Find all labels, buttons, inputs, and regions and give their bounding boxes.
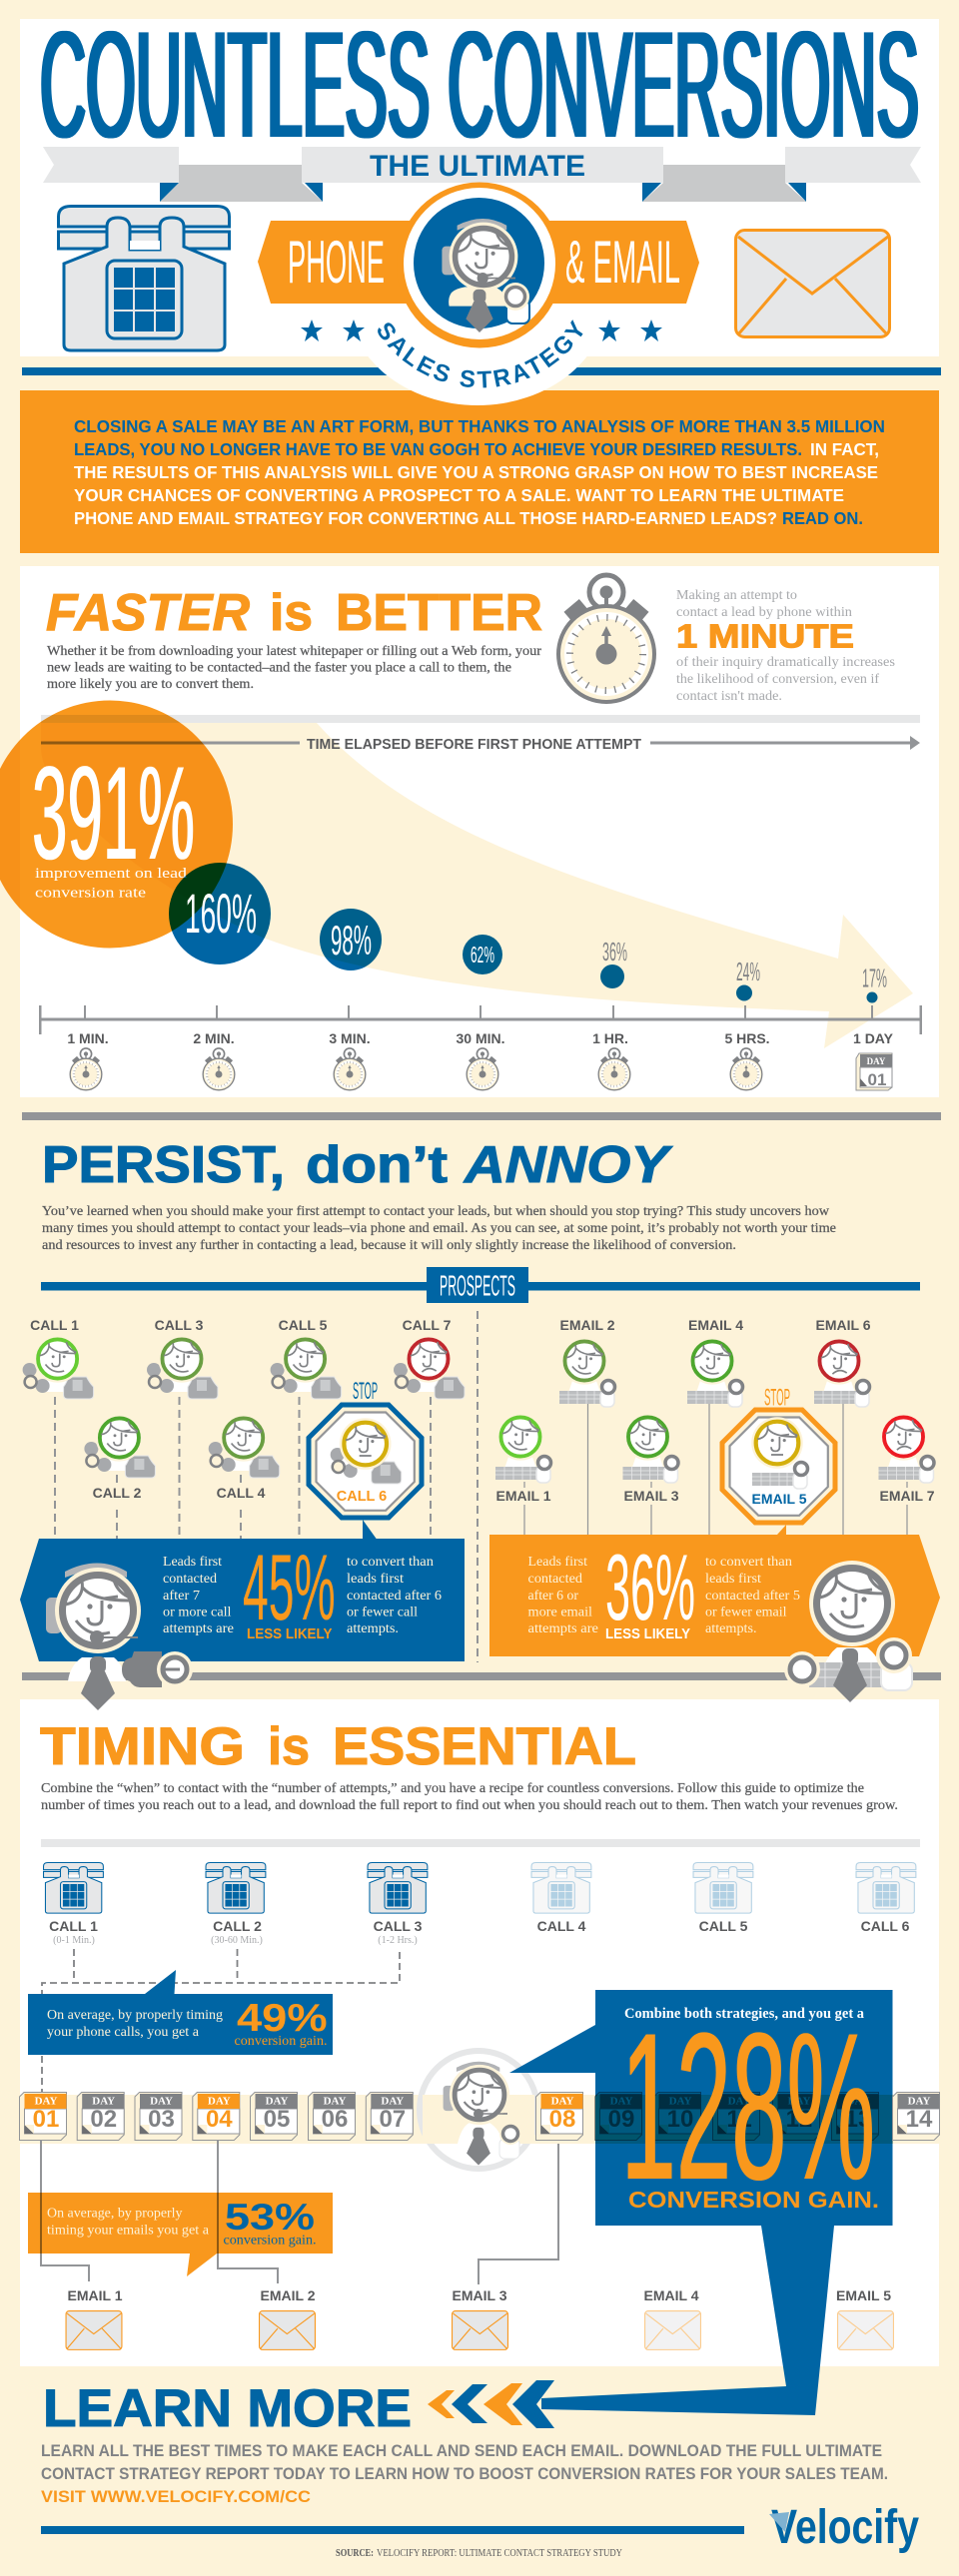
day 10: DAY	[669, 2096, 691, 2108]
learn more text: CONTACT STRATEGY REPORT TODAY TO LEARN HOW TO BOOST CONVERSION RATES FOR YOUR SALES TEAM.	[41, 2464, 888, 2483]
connector lines: emails	[524, 1404, 907, 1535]
callout: 36% less likely: or fewer email	[705, 1606, 787, 1619]
learn more text: VISIT WWW.VELOCIFY.COM/CC	[41, 2487, 311, 2506]
email labels: EMAIL 4	[644, 2287, 699, 2303]
day 13: 13	[845, 2106, 871, 2133]
ribbon text: THE ULTIMATE	[370, 150, 585, 183]
body text: number of times you reach out to a lead, and download the full report to find out when you should reach out to them. Then watch your revenues grow.	[41, 1798, 898, 1813]
decaying arrow	[41, 723, 913, 1048]
intro text	[74, 416, 885, 528]
bubble: 98%: 98%	[331, 917, 372, 964]
email 7: EMAIL 7	[880, 1488, 935, 1504]
call 3	[147, 1317, 218, 1399]
day 12	[773, 2093, 819, 2141]
callout: 45% less likely: attempts are	[163, 1621, 234, 1636]
body text	[42, 1204, 836, 1253]
email 7	[879, 1413, 935, 1504]
email labels	[68, 2287, 891, 2303]
email labels: EMAIL 3	[453, 2287, 507, 2303]
callout: 1 minute: of their inquiry dramatically increases	[676, 655, 895, 670]
stop sign: email 5: EMAIL 5	[752, 1491, 807, 1507]
email 1	[495, 1413, 551, 1504]
email 1: EMAIL 1	[496, 1488, 551, 1504]
call time ranges	[53, 1935, 418, 1946]
timeline labels: 30 MIN.	[456, 1030, 505, 1046]
chevrons	[428, 2380, 554, 2428]
day 01: DAY	[35, 2096, 57, 2108]
day 07: DAY	[381, 2096, 404, 2108]
agent left	[46, 1564, 193, 1710]
call time ranges: (1-2 Hrs.)	[378, 1935, 418, 1946]
callout: 45% less likely: leads first	[347, 1572, 404, 1587]
callout: 45% less likely: after 7	[163, 1589, 200, 1604]
email 2	[559, 1317, 615, 1407]
day 06	[308, 2093, 356, 2141]
divider bar	[41, 1839, 920, 1847]
icon: calendar day 01: 01	[868, 1070, 886, 1089]
callout: 36% less likely: contacted after 5	[705, 1589, 800, 1604]
badge: phone and email	[258, 182, 699, 347]
callout: 53%: On average, by properly	[47, 2207, 182, 2222]
text: 36%	[602, 937, 627, 966]
bubble: 391%: conversion rate	[35, 885, 146, 901]
call labels: CALL 4	[537, 1918, 586, 1934]
day 10: 10	[667, 2106, 693, 2133]
band over callout	[595, 2095, 893, 2144]
bubble: 24%	[736, 957, 760, 1000]
bubble: 160%	[169, 863, 271, 965]
icons: envelopes	[66, 2311, 893, 2349]
learn more text: LEARN ALL THE BEST TIMES TO MAKE EACH CALL AND SEND EACH EMAIL. DOWNLOAD THE FULL ULTIMATE	[41, 2441, 882, 2460]
callout: 53%: 53%	[225, 2197, 315, 2238]
badge: phone and email: & EMAIL	[565, 229, 680, 296]
callout: 45% less likely: to convert than	[347, 1555, 434, 1570]
connector lines: calls	[55, 1397, 431, 1539]
call 3: CALL 3	[155, 1317, 204, 1333]
callout: 36% less likely	[489, 1525, 940, 1656]
call labels: CALL 5	[699, 1918, 748, 1934]
callout: 36% less likely: contacted	[527, 1572, 582, 1587]
call 2: CALL 2	[93, 1485, 142, 1501]
icons: mini stopwatches	[70, 1048, 762, 1090]
day 14	[893, 2093, 939, 2141]
footer bar	[41, 2526, 744, 2534]
day 11: DAY	[728, 2096, 750, 2108]
callout: 1 minute: contact isn't made.	[676, 689, 782, 704]
timeline labels: 1 HR.	[592, 1030, 628, 1046]
icon: stopwatch	[558, 575, 654, 702]
day 11	[713, 2093, 759, 2141]
timeline labels: 5 HRS.	[724, 1030, 770, 1046]
callout: 45% less likely: or more call	[163, 1606, 232, 1619]
callout: 49%: On average, by properly timing	[47, 2008, 223, 2023]
callout: 53%: timing your emails you get a	[47, 2224, 210, 2239]
bubble: 391%	[0, 701, 233, 949]
call 7: CALL 7	[403, 1317, 452, 1333]
day 05	[250, 2093, 298, 2141]
body text	[41, 1781, 898, 1813]
day 13: DAY	[847, 2096, 869, 2108]
timeline labels: 1 DAY	[853, 1030, 894, 1046]
day 14: 14	[906, 2106, 933, 2133]
heading: persist: ANNOY	[463, 1136, 673, 1194]
heading: persist	[42, 1136, 673, 1194]
email labels: EMAIL 1	[68, 2287, 123, 2303]
icon: envelope	[735, 230, 889, 337]
bubble: 160%: 160%	[185, 882, 257, 945]
body text	[47, 644, 541, 692]
callout: 36% less likely: leads first	[705, 1572, 761, 1587]
timeline labels: 1 MIN.	[67, 1030, 109, 1046]
email attempts	[495, 1317, 935, 1504]
panel: header	[20, 19, 941, 553]
day 07: 07	[379, 2106, 406, 2133]
callout: 45% less likely: or fewer call	[347, 1606, 418, 1619]
day 02	[77, 2093, 124, 2141]
day 10	[653, 2093, 701, 2141]
callout: 45% less likely: LESS LIKELY	[247, 1626, 333, 1642]
bubble: 62%: 62%	[471, 942, 494, 967]
stop sign: call 6	[309, 1378, 422, 1518]
callout: 36% less likely: Leads first	[527, 1555, 587, 1570]
email 4: EMAIL 4	[688, 1317, 743, 1333]
callout: 1 minute	[676, 588, 895, 704]
day 12: DAY	[788, 2096, 810, 2108]
day 09: 09	[608, 2106, 634, 2133]
callout: 49%: 49%	[237, 1997, 328, 2040]
callout: 45% less likely: contacted	[163, 1572, 217, 1587]
day 05: DAY	[266, 2096, 288, 2108]
email 3	[623, 1413, 679, 1504]
big callout text: Combine both strategies, and you get a	[624, 2006, 864, 2022]
day 04: 04	[206, 2106, 233, 2133]
heading: persist: don’t	[306, 1136, 448, 1194]
heading: timing is essential	[40, 1717, 636, 1776]
ribbon	[43, 147, 921, 202]
heading: learn more: LEARN MORE	[43, 2379, 412, 2438]
call labels: CALL 3	[374, 1918, 423, 1934]
badge: phone and email: PHONE	[288, 229, 385, 296]
day strip band	[20, 2095, 939, 2144]
day 13	[831, 2093, 879, 2141]
panel: faster is better	[20, 566, 939, 1097]
body text: and resources to invest any further in contacting a lead, because it will only slightly increase the likelihood of conversion.	[42, 1238, 736, 1253]
call attempts	[23, 1317, 465, 1501]
callout: 53%: conversion gain.	[224, 2234, 316, 2249]
bubble: 391%: improvement on lead	[35, 866, 188, 882]
call labels	[49, 1918, 910, 1934]
call 5: CALL 5	[279, 1317, 328, 1333]
day 09	[595, 2093, 641, 2141]
day 09 to 13 dimmed	[595, 2093, 879, 2141]
call labels: CALL 1	[49, 1918, 98, 1934]
intro text: THE RESULTS OF THIS ANALYSIS WILL GIVE YOU A STRONG GRASP ON HOW TO BEST INCREASE	[74, 462, 878, 482]
heading: persist: PERSIST,	[42, 1136, 285, 1194]
stop sign: email 5: STOP	[764, 1384, 790, 1412]
call 1	[23, 1317, 94, 1399]
intro text: LEADS, YOU NO LONGER HAVE TO BE VAN GOGH TO ACHIEVE YOUR DESIRED RESULTS.	[74, 439, 802, 459]
callout: 49%: conversion gain.	[234, 2034, 328, 2049]
bubble: 36%	[600, 937, 627, 988]
text: 24%	[736, 957, 760, 986]
callout: 45% less likely: 45%	[243, 1535, 336, 1639]
bubble: 391%: 391%	[32, 740, 195, 888]
day 14: DAY	[908, 2096, 930, 2108]
connector: calls to timeline	[42, 1949, 400, 2094]
day 02: DAY	[92, 2096, 115, 2108]
call time ranges: (0-1 Min.)	[53, 1935, 95, 1946]
bubble: 62%	[463, 935, 502, 974]
icons: phones	[44, 1863, 916, 1913]
intro text: PHONE AND EMAIL STRATEGY FOR CONVERTING ALL THOSE HARD-EARNED LEADS?	[74, 508, 777, 528]
call labels: CALL 6	[861, 1918, 910, 1934]
connectors: timeline to emails	[41, 2141, 558, 2284]
divider bar	[41, 715, 920, 723]
callout: 45% less likely: attempts.	[347, 1621, 399, 1636]
timeline labels: 3 MIN.	[329, 1030, 371, 1046]
intro text: IN FACT,	[810, 439, 879, 459]
call 1: CALL 1	[30, 1317, 79, 1333]
callout: 36% less likely: attempts.	[705, 1621, 757, 1636]
day 02: 02	[90, 2106, 117, 2133]
panel: timing is essential	[20, 1699, 939, 2366]
icon: light bulb	[501, 283, 529, 323]
axis title: time elapsed	[41, 736, 920, 753]
body text: Whether it be from downloading your latest whitepaper or filling out a Web form, your	[47, 644, 541, 659]
source: SOURCE:	[336, 2548, 374, 2559]
callout: 36% less likely: after 6 or	[527, 1589, 578, 1604]
heading: timing is essential: TIMING	[40, 1717, 245, 1776]
big callout: 128%	[509, 1990, 893, 2415]
intro text: YOUR CHANCES OF CONVERTING A PROSPECT TO A SALE. WANT TO LEARN THE ULTIMATE	[74, 485, 844, 505]
big callout text: CONVERSION GAIN.	[628, 2187, 879, 2213]
stars	[301, 320, 662, 341]
call 4: CALL 4	[217, 1485, 266, 1501]
heading: timing is essential: ESSENTIAL	[333, 1717, 636, 1776]
stop sign: call 6: STOP	[353, 1378, 378, 1405]
day 01	[20, 2093, 66, 2141]
heading: faster is better: FASTER	[46, 584, 250, 642]
intro text: CLOSING A SALE MAY BE AN ART FORM, BUT THANKS TO ANALYSIS OF MORE THAN 3.5 MILLION	[74, 416, 885, 436]
day 08: 08	[549, 2106, 575, 2133]
day calendars	[20, 2093, 939, 2141]
bubble: 98%	[320, 909, 382, 970]
callout: 1 minute: contact a lead by phone within	[676, 605, 852, 620]
body text: more likely you are to convert them.	[47, 677, 254, 692]
email 6: EMAIL 6	[816, 1317, 871, 1333]
callout: 36% less likely: 36%	[605, 1535, 695, 1639]
agent in badge	[442, 219, 517, 332]
callout: 36% less likely: attempts are	[527, 1621, 598, 1636]
callout: 1 minute: 1 MINUTE	[676, 617, 854, 655]
day 11: 11	[726, 2106, 752, 2133]
day 03: 03	[148, 2106, 175, 2133]
heading: faster is better: BETTER	[336, 584, 542, 642]
body text: Combine the “when” to contact with the “number of attempts,” and you have a recipe for countless conversions. Follow this guide to optimize the	[41, 1781, 864, 1796]
day 05: 05	[264, 2106, 290, 2133]
callout: 45% less likely: contacted after 6	[347, 1589, 442, 1604]
stop sign: call 6: CALL 6	[337, 1489, 387, 1505]
icon: calendar day 01	[856, 1053, 892, 1090]
learn more text	[41, 2441, 888, 2506]
curved label: sales strategy: SALES STRATEGY	[378, 320, 583, 387]
email labels: EMAIL 5	[836, 2287, 891, 2303]
day 03	[135, 2093, 182, 2141]
source: VELOCIFY REPORT: ULTIMATE CONTACT STRATEGY STUDY	[377, 2548, 622, 2559]
day 06: DAY	[324, 2096, 346, 2108]
agent center	[420, 2051, 537, 2169]
callout: 53%	[28, 2193, 333, 2276]
callout: 45% less likely	[20, 1520, 465, 1661]
email 4	[687, 1317, 743, 1407]
callout: 49%	[28, 1970, 333, 2055]
email 2: EMAIL 2	[560, 1317, 615, 1333]
email 6	[814, 1317, 871, 1407]
callout: 1 minute: Making an attempt to	[676, 588, 797, 603]
call 2	[84, 1414, 155, 1501]
day 03: DAY	[150, 2096, 173, 2108]
day 08	[535, 2093, 583, 2141]
body text: new leads are waiting to be contacted–and the faster you place a call to them, the	[47, 661, 511, 675]
call 7	[394, 1317, 465, 1399]
call 4	[209, 1414, 280, 1501]
agent right	[784, 1561, 912, 1702]
callout: 1 minute: the likelihood of conversion, even if	[676, 672, 879, 687]
divider	[22, 1112, 941, 1120]
timeline labels	[67, 1030, 894, 1046]
prospects bar	[41, 1267, 920, 1303]
heading: timing is essential: is	[268, 1717, 310, 1776]
timeline axis	[39, 1005, 922, 1034]
callout: 36% less likely: LESS LIKELY	[605, 1626, 690, 1642]
prospects bar: PROSPECTS	[440, 1270, 515, 1302]
body text: many times you should attempt to contact your leads–via phone and email. As you can see, at some point, it’s probably not worth your time	[42, 1221, 836, 1236]
callout: 36% less likely: more email	[527, 1606, 592, 1619]
day 12: 12	[786, 2106, 812, 2133]
callout: 45% less likely: Leads first	[163, 1555, 222, 1570]
timeline labels: 2 MIN.	[193, 1030, 235, 1046]
text: 17%	[862, 963, 887, 992]
day 04	[193, 2093, 240, 2141]
callout: 49%: your phone calls, you get a	[47, 2025, 200, 2040]
stop sign: email 5	[722, 1384, 835, 1523]
icon: mug and bulb	[122, 1651, 193, 1687]
call time ranges: (30-60 Min.)	[211, 1935, 263, 1946]
center divider	[477, 1311, 479, 1662]
day 04: DAY	[208, 2096, 231, 2108]
callout: 36% less likely: to convert than	[705, 1555, 792, 1570]
logo: velocify: Velocify	[771, 2501, 919, 2554]
call 5	[271, 1317, 342, 1399]
day 06: 06	[322, 2106, 348, 2133]
day 09: DAY	[610, 2096, 632, 2108]
email labels: EMAIL 2	[261, 2287, 316, 2303]
divider	[22, 1672, 941, 1680]
icon: calendar day 01: DAY	[867, 1056, 886, 1066]
intro text: READ ON.	[782, 508, 863, 528]
axis title: time elapsed: TIME ELAPSED BEFORE FIRST PHONE ATTEMPT	[307, 737, 641, 753]
heading: faster is better	[46, 584, 542, 642]
call labels: CALL 2	[213, 1918, 262, 1934]
day 07	[366, 2093, 413, 2141]
bubble: 17%	[862, 963, 887, 1002]
heading: faster is better: is	[270, 584, 313, 642]
body text: You’ve learned when you should make your first attempt to contact your leads, but when should you stop trying? This study uncovers how	[42, 1204, 830, 1219]
day 08: DAY	[551, 2096, 573, 2108]
email 3: EMAIL 3	[624, 1488, 679, 1504]
day 01: 01	[33, 2106, 59, 2133]
icon: telephone	[58, 206, 230, 350]
